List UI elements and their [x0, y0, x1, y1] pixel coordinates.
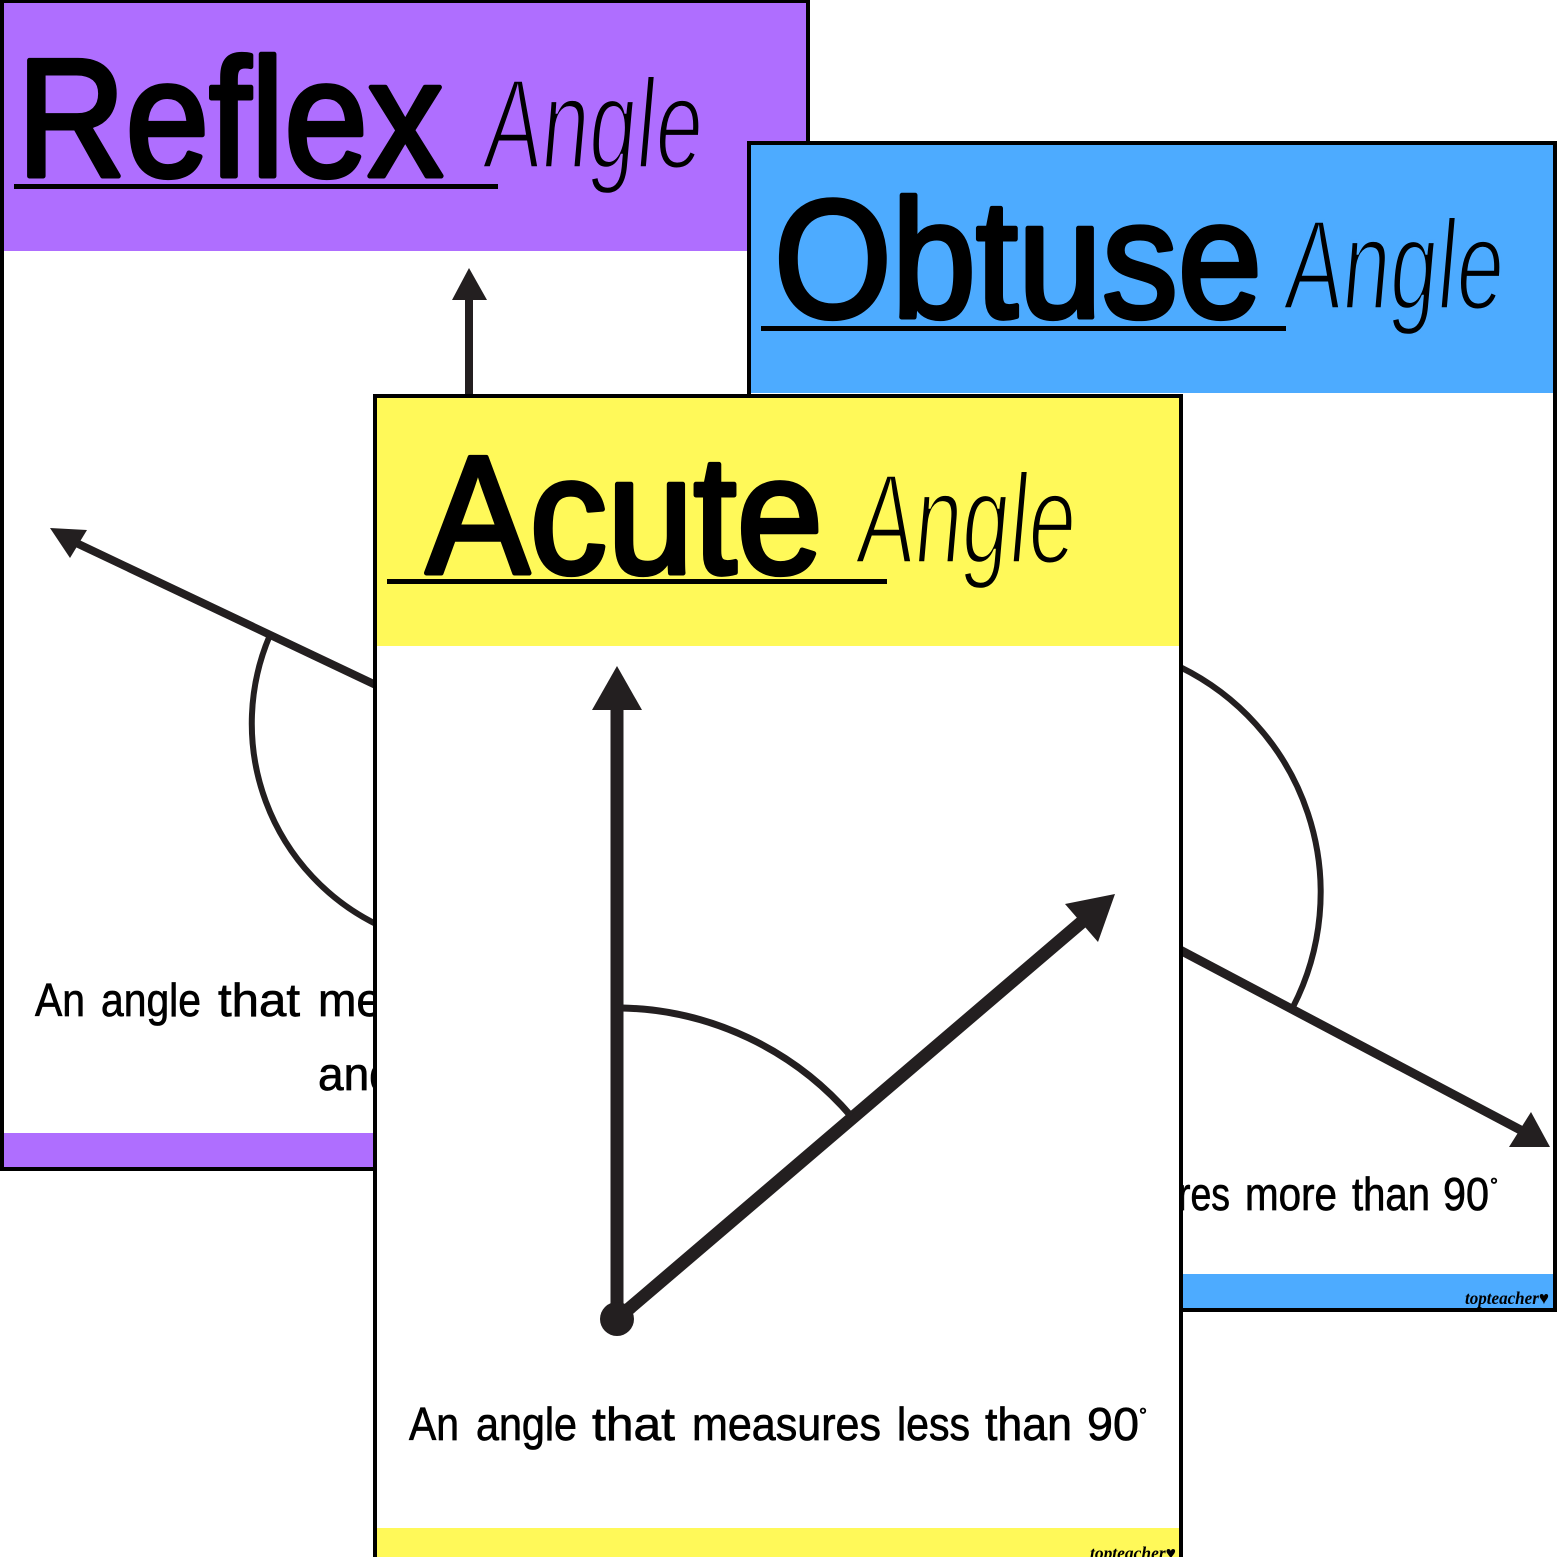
reflex description: An [35, 974, 85, 1026]
reflex heading: Reflex [17, 24, 443, 212]
acute heading: Angle [853, 448, 1083, 591]
reflex description: angle [101, 974, 201, 1026]
acute description: that [592, 1398, 675, 1450]
reflex angle diagram [50, 268, 487, 925]
acute description: than [985, 1398, 1072, 1450]
acute heading [387, 421, 1083, 609]
panel: reflex angle card [2, 1, 808, 1169]
reflex heading [14, 24, 710, 212]
acute description: angle [476, 1398, 577, 1450]
obtuse description: ° [1490, 1175, 1498, 1197]
reflex description: me [318, 974, 382, 1026]
acute header band [377, 398, 1179, 646]
obtuse description: more [1245, 1168, 1337, 1220]
obtuse heading: Obtuse [774, 165, 1262, 353]
acute angle diagram [592, 666, 1115, 1336]
reflex footer band [4, 1133, 806, 1167]
obtuse description: than [1352, 1168, 1430, 1220]
acute description: ° [1139, 1405, 1147, 1427]
obtuse description: res [1178, 1168, 1230, 1220]
obtuse header band [751, 145, 1553, 393]
obtuse description: 90 [1443, 1168, 1489, 1220]
reflex description second line: and [318, 1048, 395, 1100]
reflex heading: Angle [480, 53, 710, 196]
acute description: measures [692, 1398, 881, 1450]
panel: obtuse angle card [749, 143, 1555, 1310]
acute description: less [897, 1398, 970, 1450]
reflex header band [4, 3, 806, 251]
panel: acute angle card [375, 396, 1181, 1557]
obtuse angle diagram [1180, 667, 1550, 1147]
reflex description: that [218, 974, 300, 1026]
acute description: An [409, 1398, 459, 1450]
acute footer band [377, 1528, 1179, 1557]
obtuse footer logo: topteacher♥ [1465, 1288, 1549, 1308]
obtuse footer band [751, 1274, 1553, 1308]
acute description: 90 [1087, 1398, 1139, 1450]
acute heading: Acute [426, 421, 823, 609]
